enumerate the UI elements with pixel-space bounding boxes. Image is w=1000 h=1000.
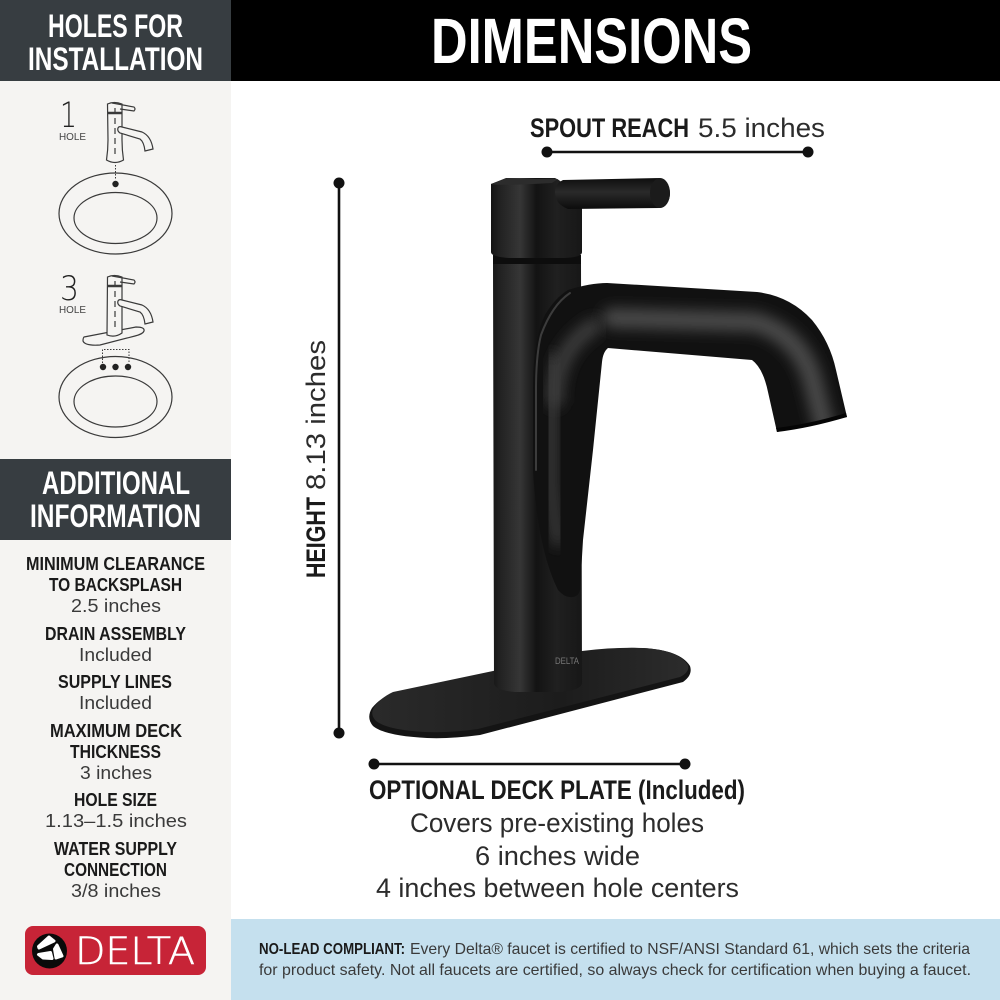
spout and neck <box>533 283 847 597</box>
dimension: height: HEIGHT <box>301 497 331 578</box>
label: 1 hole: 1 <box>60 96 77 136</box>
spec: maximum deck thickness: MAXIMUM DECK <box>50 720 183 741</box>
label: 3 hole <box>59 269 86 316</box>
icon: one hole faucet <box>106 102 153 180</box>
spec: hole size <box>45 789 187 831</box>
callout: no-lead compliant: NO-LEAD COMPLIANT: <box>259 941 405 958</box>
dimension: spout reach: 5.5 inches <box>698 113 825 143</box>
label: 1 hole: HOLE <box>59 131 86 143</box>
dimension: height: 8.13 inches <box>301 340 331 490</box>
dimension: spout reach: SPOUT REACH <box>530 113 689 143</box>
icon: one hole basin <box>59 173 172 254</box>
heading: dimensions: DIMENSIONS <box>431 5 752 77</box>
text block: optional deck plate: 4 inches between hole centers <box>376 873 739 903</box>
spec: minimum clearance: 2.5 inches <box>71 595 161 616</box>
logo: delta: DELTA <box>75 930 195 973</box>
dimension line: deck plate <box>368 758 690 770</box>
spec: water supply connection: WATER SUPPLY <box>54 838 178 859</box>
icon: one hole faucet and basin <box>59 96 172 254</box>
hub top facet <box>491 179 558 185</box>
logo: delta <box>25 926 206 975</box>
text block: additional information list <box>26 553 205 901</box>
dimension: spout reach <box>530 113 825 158</box>
spec: water supply connection <box>54 838 178 901</box>
callout: no-lead compliant: for product safety. Not all faucets are certified, so always check for certification when buying a faucet. <box>259 962 971 979</box>
spec: drain assembly: DRAIN ASSEMBLY <box>45 623 187 644</box>
faucet logo text: DELTA <box>555 656 579 666</box>
callout: no-lead compliant <box>231 919 1000 1000</box>
spec: supply lines <box>58 671 172 713</box>
text block: optional deck plate <box>369 775 745 903</box>
icon: three hole faucet with plate <box>83 276 153 345</box>
collar between hub and body <box>493 255 581 264</box>
heading: holes for installation: HOLES FOR <box>48 8 183 44</box>
spec: drain assembly: Included <box>79 644 152 665</box>
spout outlet <box>776 413 847 432</box>
handle hub <box>491 178 582 258</box>
spec: minimum clearance <box>26 553 205 616</box>
spec: water supply connection: CONNECTION <box>64 859 167 880</box>
heading: additional information: INFORMATION <box>30 498 201 534</box>
spec: maximum deck thickness: THICKNESS <box>70 741 161 762</box>
lever end cap <box>650 178 670 208</box>
spec: maximum deck thickness <box>50 720 183 783</box>
spec: supply lines: SUPPLY LINES <box>58 671 172 692</box>
spec: minimum clearance: MINIMUM CLEARANCE <box>26 553 205 574</box>
spec: drain assembly <box>45 623 187 665</box>
text block: optional deck plate: Covers pre-existing holes <box>410 808 704 838</box>
text block: optional deck plate: OPTIONAL DECK PLATE (Included) <box>369 775 745 805</box>
icon: three hole basin <box>59 350 172 438</box>
faucet body <box>493 262 582 692</box>
callout: no-lead compliant: Every Delta® faucet is certified to NSF/ANSI Standard 61, which sets the criteria <box>410 941 970 958</box>
spec: water supply connection: 3/8 inches <box>71 880 161 901</box>
panel: left sidebar background <box>0 0 231 1000</box>
faucet photo <box>369 178 847 738</box>
spec: maximum deck thickness: 3 inches <box>80 762 152 783</box>
heading: dimensions <box>231 0 1000 81</box>
label: 3 hole: 3 <box>60 269 79 309</box>
spec: hole size: HOLE SIZE <box>74 789 157 810</box>
heading: holes for installation <box>0 0 231 81</box>
dimension: height <box>301 178 344 738</box>
spec: hole size: 1.13–1.5 inches <box>45 810 187 831</box>
icon: three hole faucet and basin <box>59 269 172 438</box>
deck plate <box>369 648 691 738</box>
label: 3 hole: HOLE <box>59 304 86 316</box>
lever <box>555 178 670 209</box>
spec: minimum clearance: TO BACKSPLASH <box>49 574 182 595</box>
text block: optional deck plate: 6 inches wide <box>475 841 640 871</box>
heading: additional information: ADDITIONAL <box>42 465 190 501</box>
heading: holes for installation: INSTALLATION <box>28 41 203 77</box>
heading: additional information <box>0 459 231 540</box>
spec: supply lines: Included <box>79 692 152 713</box>
